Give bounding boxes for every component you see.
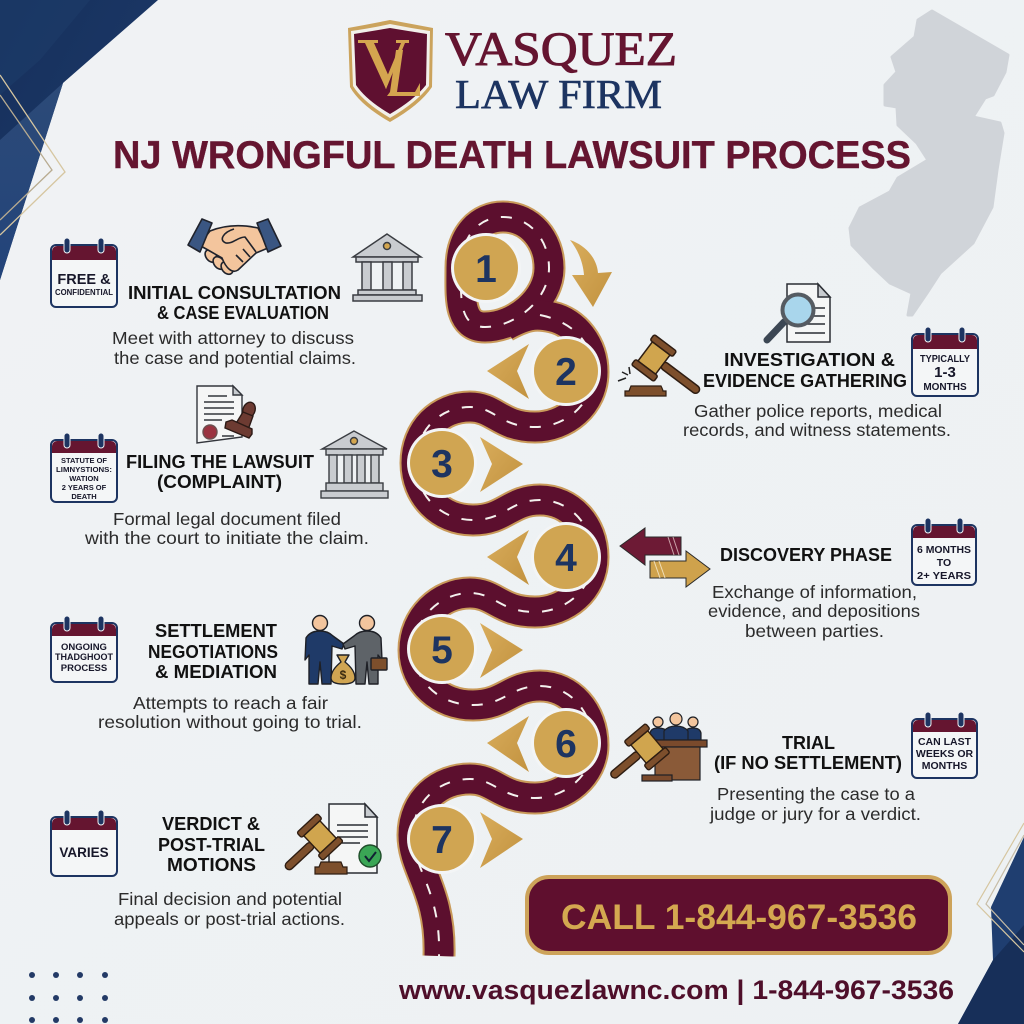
- description: Formal legal document filed: [113, 509, 341, 529]
- decoration: bottom-right navy shape: [958, 823, 1024, 1024]
- step badge 1: [451, 233, 521, 303]
- description: evidence, and depositions: [708, 601, 920, 621]
- step badge 4: [531, 522, 601, 592]
- icon: calendar typically 1-3 months: 1-3: [934, 364, 956, 381]
- description: judge or jury for a verdict.: [709, 804, 921, 824]
- icon: document with magnifier: [767, 284, 830, 342]
- icon: calendar 6 months to 2+ years: TO: [937, 557, 951, 569]
- icon: calendar ongoing: [51, 616, 117, 682]
- step badge 3: [407, 428, 477, 498]
- description: [98, 693, 362, 732]
- description: with the court to initiate the claim.: [84, 528, 369, 548]
- panel: step 7 verdict: [51, 804, 381, 929]
- icon: calendar free and confidential: CONFIDENTIAL: [55, 288, 113, 297]
- heading: [714, 732, 902, 773]
- description: records, and witness statements.: [683, 420, 951, 440]
- description: Presenting the case to a: [717, 784, 915, 804]
- heading: MOTIONS: [167, 854, 256, 875]
- icon: calendar varies: [51, 810, 117, 876]
- text: Vasquez: VASQUEZ: [445, 23, 677, 76]
- arrow: step 3: [480, 437, 523, 492]
- step badge 6: [531, 708, 601, 778]
- heading: & MEDIATION: [155, 661, 277, 682]
- icon: calendar statute of limitations: LIMNYSTIONS:: [56, 465, 112, 474]
- step badge 7: 7: [431, 819, 453, 862]
- step badge 5: 5: [431, 629, 453, 672]
- description: the case and potential claims.: [114, 348, 356, 368]
- panel: step 2 investigation: [618, 284, 978, 440]
- panel: step 5 settlement: [51, 616, 387, 732]
- icon: calendar can last weeks or months: WEEKS OR: [916, 748, 974, 760]
- arrow: step 6: [487, 716, 529, 772]
- icon: courthouse: [321, 431, 388, 498]
- icon: calendar can last weeks or months: CAN LAST: [918, 736, 972, 748]
- heading: SETTLEMENT: [155, 620, 278, 641]
- icon: calendar ongoing: ONGOING: [61, 642, 107, 653]
- step badge 7: [407, 804, 477, 874]
- description: [708, 582, 920, 641]
- icon: calendar free and confidential: [51, 238, 117, 307]
- panel: step 3 filing the lawsuit: [51, 386, 388, 548]
- heading: [126, 451, 315, 492]
- icon: shield: [348, 20, 433, 122]
- title: NJ WRONGFUL DEATH LAWSUIT PROCESS: [113, 134, 911, 177]
- icon: handshake: [188, 219, 281, 277]
- heading: [703, 349, 907, 391]
- icon: calendar varies: VARIES: [59, 845, 109, 860]
- icon: calendar can last weeks or months: [912, 712, 977, 778]
- call to action button: [527, 877, 950, 953]
- description: resolution without going to trial.: [98, 712, 362, 732]
- description: [114, 889, 345, 929]
- icon: exchange arrows: [620, 528, 710, 587]
- step badge 5: [407, 614, 477, 684]
- heading: (COMPLAINT): [157, 471, 282, 492]
- icon: calendar statute of limitations: WATION: [69, 474, 99, 483]
- icon: calendar 6 months to 2+ years: 2+ YEARS: [917, 570, 971, 582]
- arrow: step 4: [487, 530, 529, 585]
- description: [84, 509, 369, 548]
- panel: step 6 trial: [600, 712, 977, 824]
- icon: calendar 6 months to 2+ years: 6 MONTHS: [917, 544, 971, 556]
- description: Meet with attorney to discuss: [112, 328, 354, 348]
- icon: handshake with money bag: $: [340, 668, 347, 682]
- decoration: top-left navy shape: [0, 0, 158, 280]
- step badge 2: 2: [555, 351, 577, 394]
- icon: calendar free and confidential: FREE &: [57, 272, 111, 288]
- step badge 1: 1: [475, 248, 497, 291]
- heading: FILING THE LAWSUIT: [126, 451, 315, 472]
- icon: courthouse: [353, 234, 422, 301]
- arrow: step 5: [480, 623, 523, 678]
- icon: calendar can last weeks or months: MONTHS: [922, 760, 967, 772]
- description: Gather police reports, medical: [694, 401, 942, 421]
- icon: calendar 6 months to 2+ years: [912, 518, 976, 585]
- arrow: step 7: [480, 812, 523, 868]
- logo: Vasquez Law Firm: [348, 20, 677, 122]
- description: [709, 784, 921, 824]
- map: New Jersey silhouette: [850, 11, 1008, 315]
- text: Law Firm: LAW FIRM: [455, 71, 662, 117]
- heading: VERDICT &: [162, 813, 260, 834]
- icon: document and stamp: [197, 386, 257, 443]
- icon: gavel, document and check: [273, 804, 381, 882]
- icon: calendar typically 1-3 months: TYPICALLY: [920, 354, 970, 365]
- panel: step 4 discovery: [620, 518, 976, 641]
- icon: handshake with money bag: [305, 616, 387, 684]
- icon: calendar statute of limitations: STATUTE OF: [61, 456, 107, 465]
- step badge 2: [531, 336, 601, 406]
- description: appeals or post-trial actions.: [114, 909, 345, 929]
- decoration: dot grid: [29, 972, 108, 1023]
- heading: TRIAL: [782, 732, 835, 753]
- arrow: step 2: [487, 344, 529, 399]
- heading: EVIDENCE GATHERING: [703, 370, 907, 391]
- icon: calendar statute of limitations: [51, 433, 117, 502]
- icon: calendar typically 1-3 months: MONTHS: [923, 382, 967, 393]
- step badge 4: 4: [555, 537, 577, 580]
- heading: & CASE EVALUATION: [157, 302, 329, 323]
- icon: calendar ongoing: THADGHOOT: [55, 652, 113, 662]
- heading: (IF NO SETTLEMENT): [714, 752, 902, 773]
- description: Attempts to reach a fair: [133, 693, 328, 713]
- icon: calendar statute of limitations: DEATH: [71, 492, 97, 501]
- step badge 6: 6: [555, 723, 577, 766]
- description: [683, 401, 951, 440]
- step badge 3: 3: [431, 443, 453, 486]
- description: [112, 328, 356, 368]
- description: Final decision and potential: [118, 889, 342, 909]
- icon: gavel: [618, 334, 710, 407]
- road: winding path: [413, 217, 593, 956]
- heading: [148, 620, 278, 682]
- heading: [158, 813, 265, 875]
- icon: calendar typically 1-3 months: [912, 327, 978, 396]
- footer contact line: www.vasquezlawnc.com | 1-844-967-3536: [398, 975, 954, 1005]
- heading: INVESTIGATION &: [724, 349, 895, 370]
- heading: POST-TRIAL: [158, 834, 265, 855]
- description: Exchange of information,: [712, 582, 917, 602]
- panel: step 1 initial consultation: [51, 219, 422, 368]
- arrow: curved step 1 to 2: [570, 240, 612, 307]
- heading: INITIAL CONSULTATION: [128, 282, 341, 303]
- icon: calendar ongoing: PROCESS: [61, 663, 107, 674]
- call to action button: CALL 1-844-967-3536: [561, 898, 917, 937]
- icon: jury bench and gavel: [600, 713, 707, 791]
- heading: NEGOTIATIONS: [148, 641, 278, 662]
- description: between parties.: [745, 621, 884, 641]
- icon: calendar statute of limitations: 2 YEARS OF: [62, 483, 107, 492]
- heading: DISCOVERY PHASE: [720, 544, 892, 565]
- heading: [128, 282, 341, 323]
